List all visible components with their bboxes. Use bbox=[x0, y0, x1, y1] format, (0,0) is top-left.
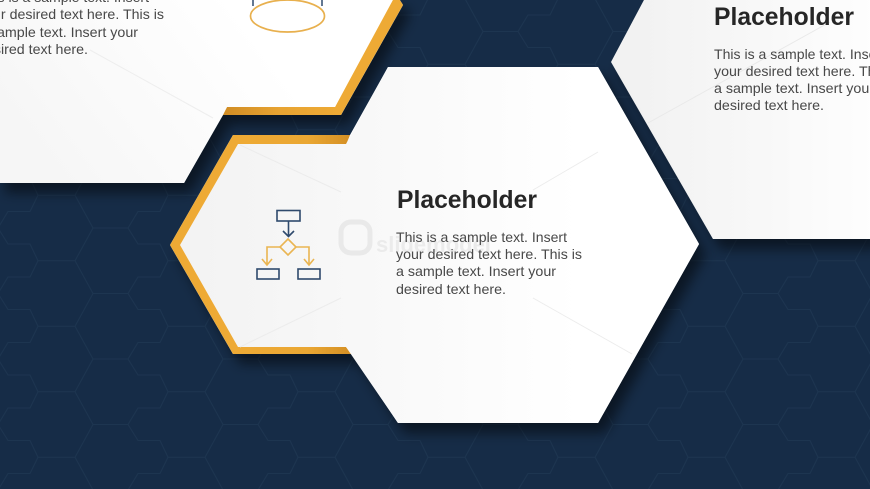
faint guide line bbox=[90, 50, 213, 118]
text block: central sample text: desired text here. bbox=[396, 281, 506, 297]
gold border of top-left hexagon bbox=[223, 0, 403, 115]
faint guide line on right hexagon bbox=[648, 22, 830, 123]
text block: central sample text: your desired text here. This is bbox=[396, 246, 582, 262]
gold border of central left hexagon bbox=[170, 135, 352, 354]
body of right hexagon bbox=[611, 0, 870, 239]
text block: right sample text: desired text here. bbox=[714, 97, 824, 113]
faint guide lines bbox=[240, 145, 632, 354]
white body of top-left hexagon bbox=[0, 0, 394, 183]
text block: right sample text: a sample text. Insert your bbox=[714, 80, 870, 96]
watermark: slidemodel bbox=[376, 232, 491, 257]
heading: central hexagon: Placeholder bbox=[397, 186, 537, 214]
text block: top-left sample text bbox=[0, 0, 164, 57]
shadow silhouette of central hexagon bbox=[170, 67, 699, 423]
text block: right sample text bbox=[714, 46, 870, 113]
text block: central sample text: a sample text. Insert your bbox=[396, 263, 556, 279]
panel: central hexagon bbox=[170, 67, 699, 423]
icon: flowchart bbox=[257, 210, 320, 279]
icon: partial cylinder on top-left hexagon bbox=[250, 0, 324, 32]
shadow silhouette of top-left hexagon bbox=[0, 0, 403, 183]
panel: top-left hexagon bbox=[0, 0, 403, 183]
text block: central sample text: This is a sample text. Insert bbox=[396, 229, 567, 245]
watermark bbox=[341, 222, 491, 257]
body of central hexagon bbox=[180, 67, 699, 423]
heading: right hexagon: Placeholder bbox=[714, 3, 854, 31]
panel: right hexagon bbox=[611, 0, 870, 239]
text block: central sample text bbox=[396, 229, 582, 297]
